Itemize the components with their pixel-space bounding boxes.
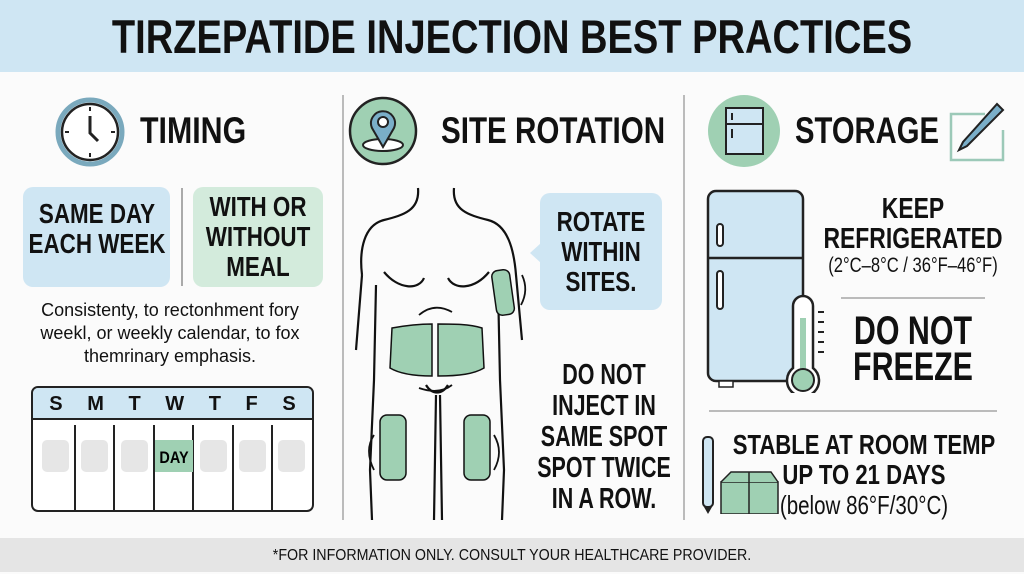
text: consistency note xyxy=(40,300,300,366)
icon: clock xyxy=(56,98,124,166)
title banner: TIRZEPATIDE INJECTION BEST PRACTICES xyxy=(112,10,912,63)
box: with or without meal: MEAL xyxy=(226,251,290,282)
text: do not inject: DO NOT xyxy=(562,359,646,391)
icon: fridge circle xyxy=(708,95,780,167)
text: do not inject xyxy=(537,359,671,515)
box: same day each week xyxy=(23,187,170,287)
text: consistency note: themrinary emphasis. xyxy=(84,346,256,366)
text: consistency note: weekl, or weekly calendar, to fox xyxy=(40,323,300,343)
text: consistency note: Consistenty, to rectonhment fory xyxy=(41,300,299,320)
text: do not freeze xyxy=(853,309,972,389)
calendar: DAY xyxy=(159,449,189,467)
panel: timing xyxy=(23,98,323,512)
body diagram xyxy=(354,188,526,520)
footer disclaimer: *FOR INFORMATION ONLY. CONSULT YOUR HEALTHCARE PROVIDER. xyxy=(273,547,751,564)
heading: storage: STORAGE xyxy=(795,110,939,151)
text: stable at room temp xyxy=(733,429,995,520)
icon: pen and box xyxy=(702,436,779,514)
calendar xyxy=(31,386,314,512)
callout: rotate within sites: WITHIN xyxy=(561,236,641,267)
text: do not freeze: FREEZE xyxy=(853,345,972,389)
title banner xyxy=(0,0,1024,72)
box: with or without meal xyxy=(193,187,323,287)
text: keep refrigerated xyxy=(823,193,1002,277)
text: do not freeze: DO NOT xyxy=(853,309,972,353)
callout: rotate within sites xyxy=(540,193,662,310)
heading: timing: TIMING xyxy=(140,110,246,151)
text: stable at room temp: (below 86°F/30°C) xyxy=(780,490,948,520)
box: with or without meal: WITHOUT xyxy=(206,221,310,252)
box: with or without meal: WITH OR xyxy=(209,191,307,222)
calendar: T xyxy=(128,393,141,415)
box: same day each week: SAME DAY xyxy=(38,198,155,229)
callout: rotate within sites: ROTATE xyxy=(557,206,645,237)
text: stable at room temp: STABLE AT ROOM TEMP xyxy=(733,429,995,460)
calendar: F xyxy=(246,393,258,415)
callout: rotate within sites: SITES. xyxy=(566,266,636,297)
text: stable at room temp: UP TO 21 DAYS xyxy=(782,459,946,490)
footer disclaimer xyxy=(0,538,1024,572)
text: keep refrigerated: KEEP xyxy=(881,193,944,225)
text: do not inject: INJECT IN xyxy=(552,390,656,422)
calendar: M xyxy=(87,393,104,415)
text: keep refrigerated: REFRIGERATED xyxy=(823,223,1002,255)
text: do not inject: IN A ROW. xyxy=(552,483,656,515)
heading: site rotation: SITE ROTATION xyxy=(441,110,665,151)
text: do not inject: SPOT TWICE xyxy=(537,452,671,484)
calendar: W xyxy=(165,393,184,415)
calendar: S xyxy=(49,393,63,415)
text: keep refrigerated: (2°C–8°C / 36°F–46°F) xyxy=(828,254,997,277)
panel: storage xyxy=(702,95,1004,520)
box: same day each week: EACH WEEK xyxy=(28,228,165,259)
calendar: S xyxy=(282,393,296,415)
icon: fridge with thermometer xyxy=(706,190,824,393)
calendar: T xyxy=(209,393,221,415)
icon: location pin xyxy=(348,96,418,166)
panel: site rotation xyxy=(348,96,671,520)
text: do not inject: SAME SPOT xyxy=(541,421,667,453)
icon: pen and box xyxy=(950,102,1004,162)
